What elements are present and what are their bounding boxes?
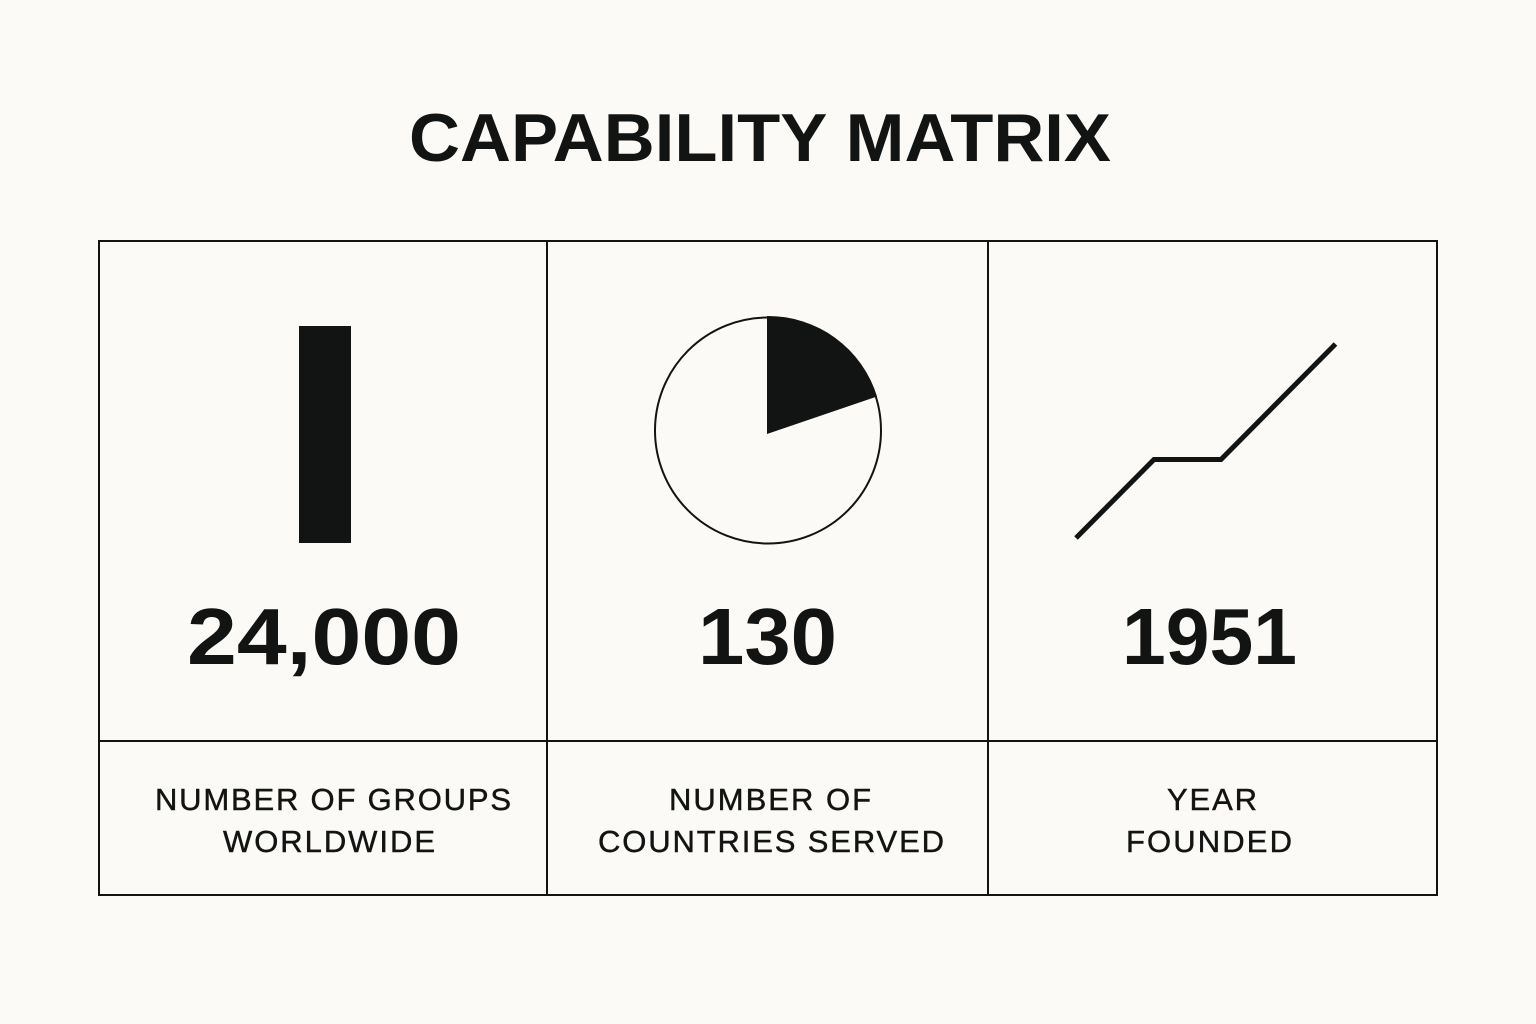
number: 24,000: 24,000 <box>187 592 461 681</box>
panel: groups worldwide <box>187 326 461 681</box>
label: year founded <box>1126 782 1292 859</box>
icon: bar <box>299 326 351 543</box>
label: number of countries served <box>598 782 944 859</box>
label: number of countries served: COUNTRIES SERVED <box>598 824 944 859</box>
icon: line chart <box>1076 344 1336 538</box>
label: number of groups worldwide: NUMBER OF GROUPS <box>155 782 511 817</box>
label: number of countries served: NUMBER OF <box>669 782 871 817</box>
panel: year founded <box>1076 344 1336 681</box>
panel: countries served <box>655 316 881 681</box>
label: number of groups worldwide: WORLDWIDE <box>223 824 435 859</box>
title: CAPABILITY MATRIX <box>409 100 1111 176</box>
label: year founded: FOUNDED <box>1126 824 1292 859</box>
icon: pie chart <box>655 316 881 544</box>
label: number of groups worldwide <box>155 782 511 859</box>
number: 1951: 1951 <box>1122 592 1297 681</box>
label: year founded: YEAR <box>1167 782 1257 817</box>
number: 130: 130 <box>698 592 837 681</box>
matrix table grid <box>99 241 1437 895</box>
